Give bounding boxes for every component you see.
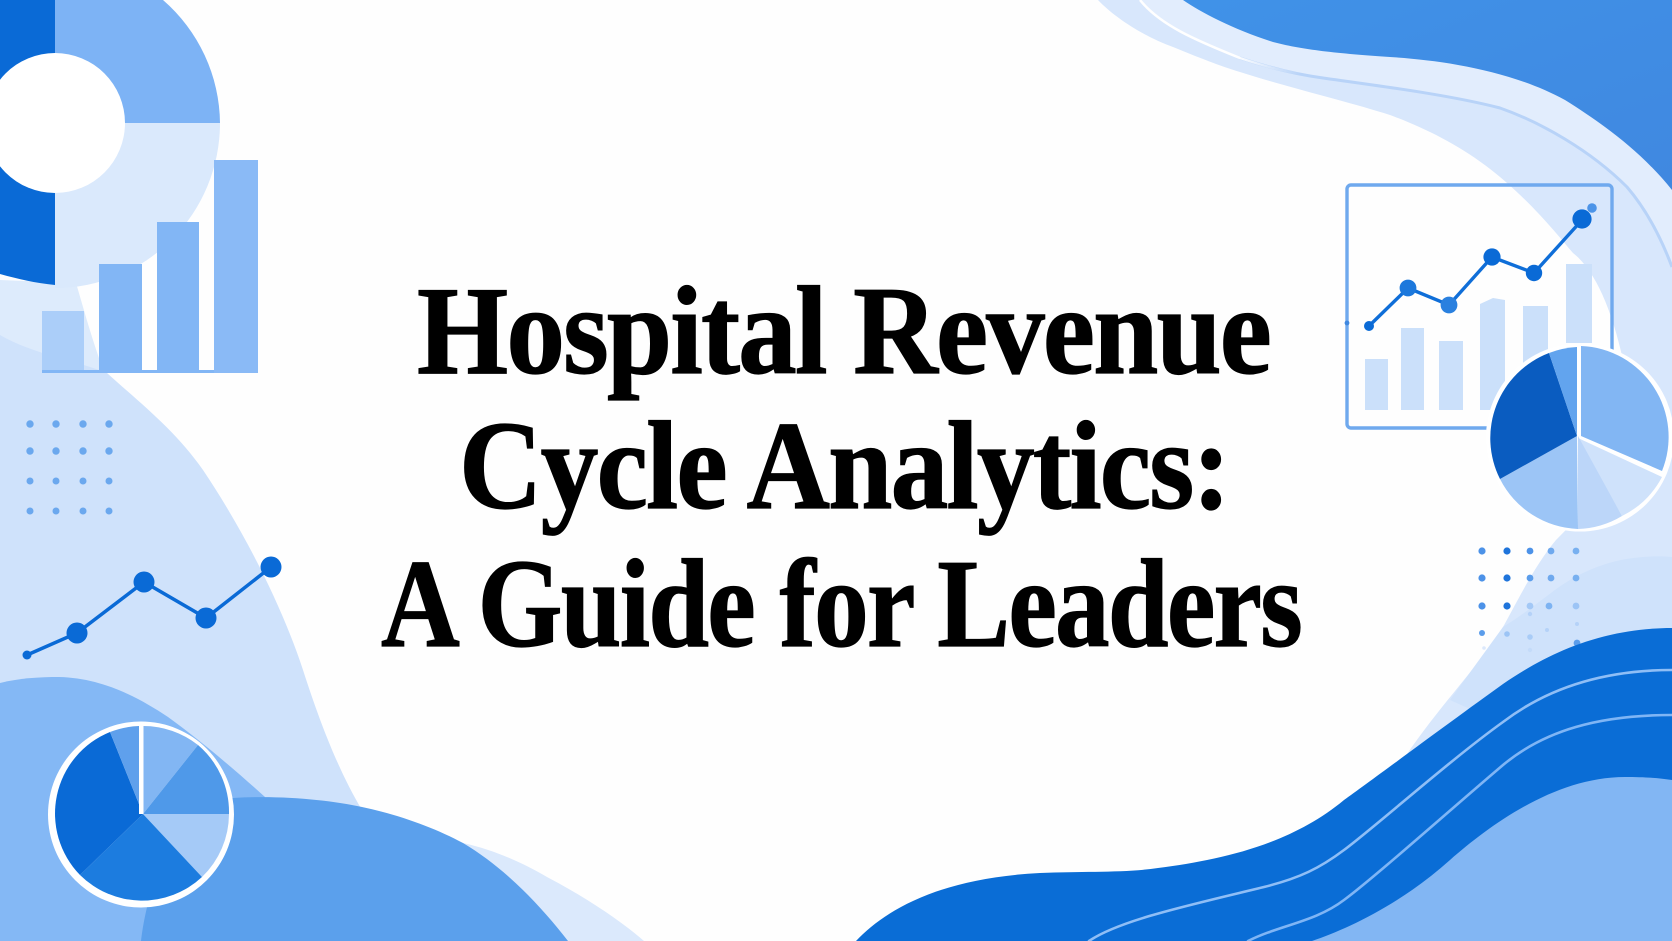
bottom-right pale blob bbox=[1450, 556, 1672, 800]
left pale blob bbox=[0, 280, 110, 400]
bar chart: top-left bbox=[42, 160, 258, 373]
bottom-left pale blob bbox=[440, 843, 644, 941]
top-right light wave band bbox=[1098, 0, 1672, 800]
title bbox=[381, 262, 1301, 674]
bottom-centre blue blob bbox=[141, 797, 568, 941]
chart bars bbox=[1365, 264, 1592, 410]
dot grid: right bbox=[1478, 547, 1580, 652]
pie chart: right bbox=[1486, 344, 1672, 532]
bottom-right light blue wave bbox=[1312, 777, 1672, 941]
chart panel: top-right bbox=[1345, 185, 1612, 428]
pie chart: bottom-left bbox=[48, 722, 234, 908]
bottom-left blue blob bbox=[0, 677, 300, 941]
chart frame bbox=[1347, 185, 1612, 428]
chart trend line bbox=[1345, 203, 1597, 331]
line chart: left bbox=[22, 556, 282, 660]
top-right blue wave bbox=[1183, 0, 1672, 190]
left light blue blob bbox=[0, 335, 362, 850]
bottom-right dark blue wave bbox=[856, 628, 1672, 941]
title line 3: A Guide for Leaders bbox=[381, 535, 1301, 674]
title line 2: Cycle Analytics: bbox=[459, 397, 1229, 536]
dot grid: left bbox=[26, 420, 113, 514]
ring chart: top-left bbox=[0, 0, 220, 288]
title line 1: Hospital Revenue bbox=[417, 262, 1270, 401]
bottom-right wave lines bbox=[1089, 670, 1672, 941]
